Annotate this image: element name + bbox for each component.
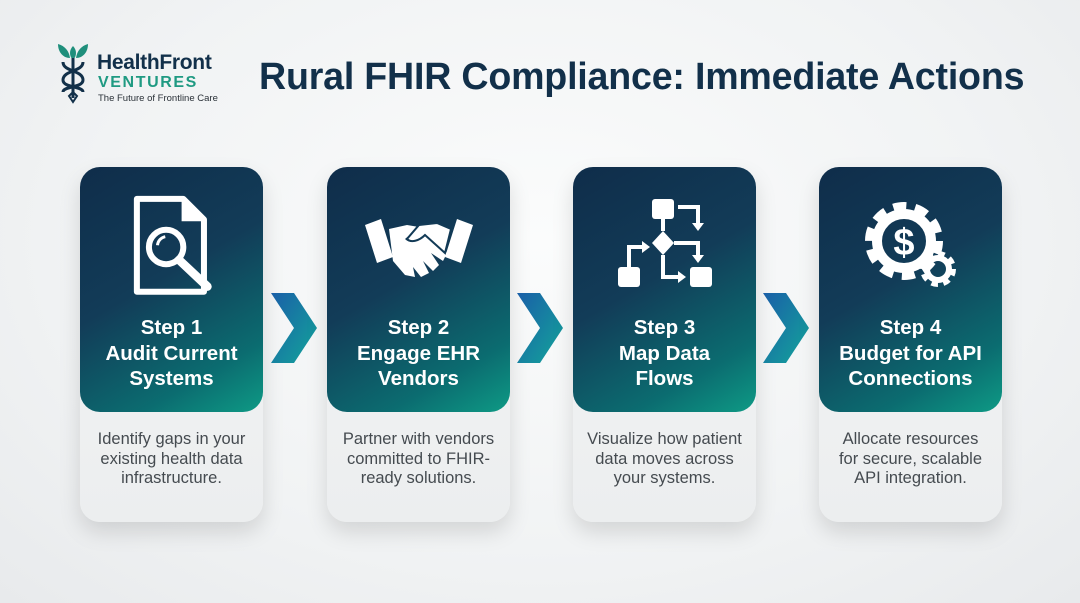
description: Visualize how patient <box>587 430 742 448</box>
heading: Step 1 <box>141 316 202 339</box>
heading: Map Data <box>619 342 710 364</box>
description: existing health data <box>100 450 243 468</box>
description: for secure, scalable <box>839 450 982 468</box>
panel: step 1 <box>80 167 263 522</box>
panel: step 3 <box>573 167 756 522</box>
description: your systems. <box>614 469 715 487</box>
icon: gear with dollar: $ <box>893 222 915 264</box>
icon: document magnifier <box>134 196 212 295</box>
icon: caduceus leaf <box>58 44 88 104</box>
heading <box>839 316 982 390</box>
arrow 3 <box>763 293 809 363</box>
heading <box>357 316 480 390</box>
panel: step 2 <box>327 167 510 522</box>
icon: handshake <box>365 219 473 277</box>
title: Rural FHIR Compliance: Immediate Actions <box>259 55 1024 97</box>
panel: step 4 <box>819 167 1002 522</box>
heading: Step 2 <box>388 316 449 339</box>
description <box>98 430 246 487</box>
heading <box>619 316 710 390</box>
heading: Systems <box>129 367 214 390</box>
heading: Step 3 <box>634 316 695 339</box>
description: committed to FHIR- <box>347 450 490 468</box>
icon: gear with dollar <box>865 202 956 287</box>
arrow 1 <box>271 293 317 363</box>
description: Identify gaps in your <box>98 430 245 448</box>
heading: Audit Current <box>105 342 238 364</box>
tagline: The Future of Frontline Care <box>98 93 218 104</box>
description: Partner with vendors <box>343 430 494 448</box>
description: Allocate resources <box>843 430 978 448</box>
arrow 2 <box>517 293 563 363</box>
icon: flowchart <box>618 199 712 287</box>
heading: Vendors <box>378 367 459 390</box>
description <box>343 430 494 487</box>
logo <box>58 44 218 104</box>
heading: Budget for API <box>839 342 982 364</box>
heading: Step 4 <box>880 316 941 339</box>
heading: Engage EHR <box>357 342 480 364</box>
heading: Connections <box>848 367 973 390</box>
description <box>587 430 742 487</box>
brand name: HealthFront <box>97 51 212 74</box>
heading <box>105 316 238 390</box>
description <box>839 430 982 487</box>
description: ready solutions. <box>361 469 476 487</box>
brand subtitle: VENTURES <box>98 74 198 91</box>
description: data moves across <box>595 450 734 468</box>
heading: Flows <box>635 367 694 390</box>
description: infrastructure. <box>121 469 222 487</box>
description: API integration. <box>854 469 967 487</box>
